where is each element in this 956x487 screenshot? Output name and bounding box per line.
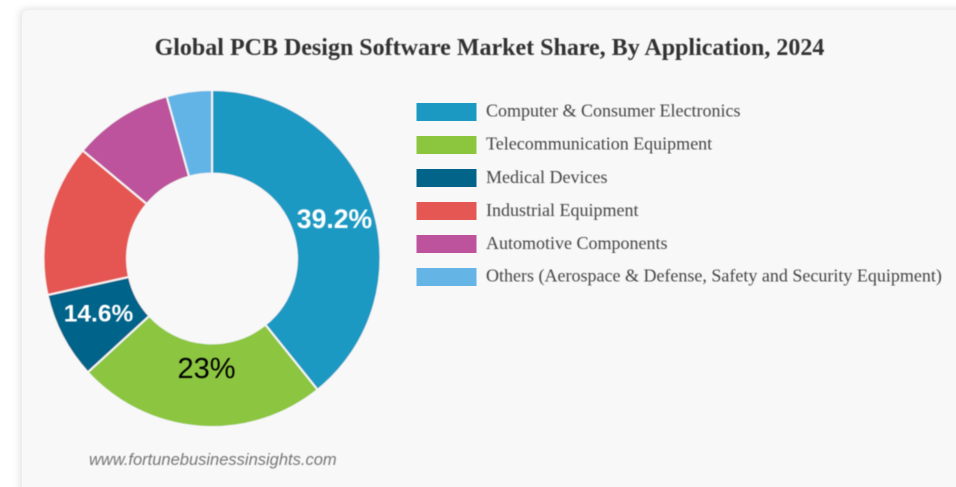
legend [416, 100, 942, 286]
value label: 23%: 23% [177, 353, 236, 385]
value label: 14.6%: 14.6% [64, 300, 133, 328]
legend item: Medical Devices: Medical Devices [486, 167, 607, 187]
source URL: www.fortunebusinessinsights.com [89, 451, 337, 469]
value label: 39.2%: 39.2% [297, 204, 372, 234]
segment: Computer & Consumer Electronics [212, 90, 380, 390]
donut chart [43, 90, 380, 427]
legend item: Telecommunication Equipment: Telecommunication Equipment [486, 134, 712, 154]
legend item: Industrial Equipment: Industrial Equipment [486, 200, 638, 220]
segment: Medical Devices [48, 277, 149, 372]
segment: Others [167, 90, 212, 177]
legend item: Others: Others (Aerospace & Defense, Safety and Security Equipment) [486, 266, 942, 286]
segment: Automotive Components [83, 96, 189, 204]
legend item: Medical Devices [416, 167, 607, 187]
segment: Telecommunication Equipment [88, 316, 318, 427]
legend item: Industrial Equipment [416, 200, 638, 220]
legend item: Automotive Components: Automotive Components [486, 233, 668, 253]
segment: Industrial Equipment [43, 150, 147, 295]
title: Global PCB Design Software Market Share, By Application, 2024 [155, 35, 824, 61]
legend item: Computer & Consumer Electronics: Computer & Consumer Electronics [486, 100, 740, 120]
